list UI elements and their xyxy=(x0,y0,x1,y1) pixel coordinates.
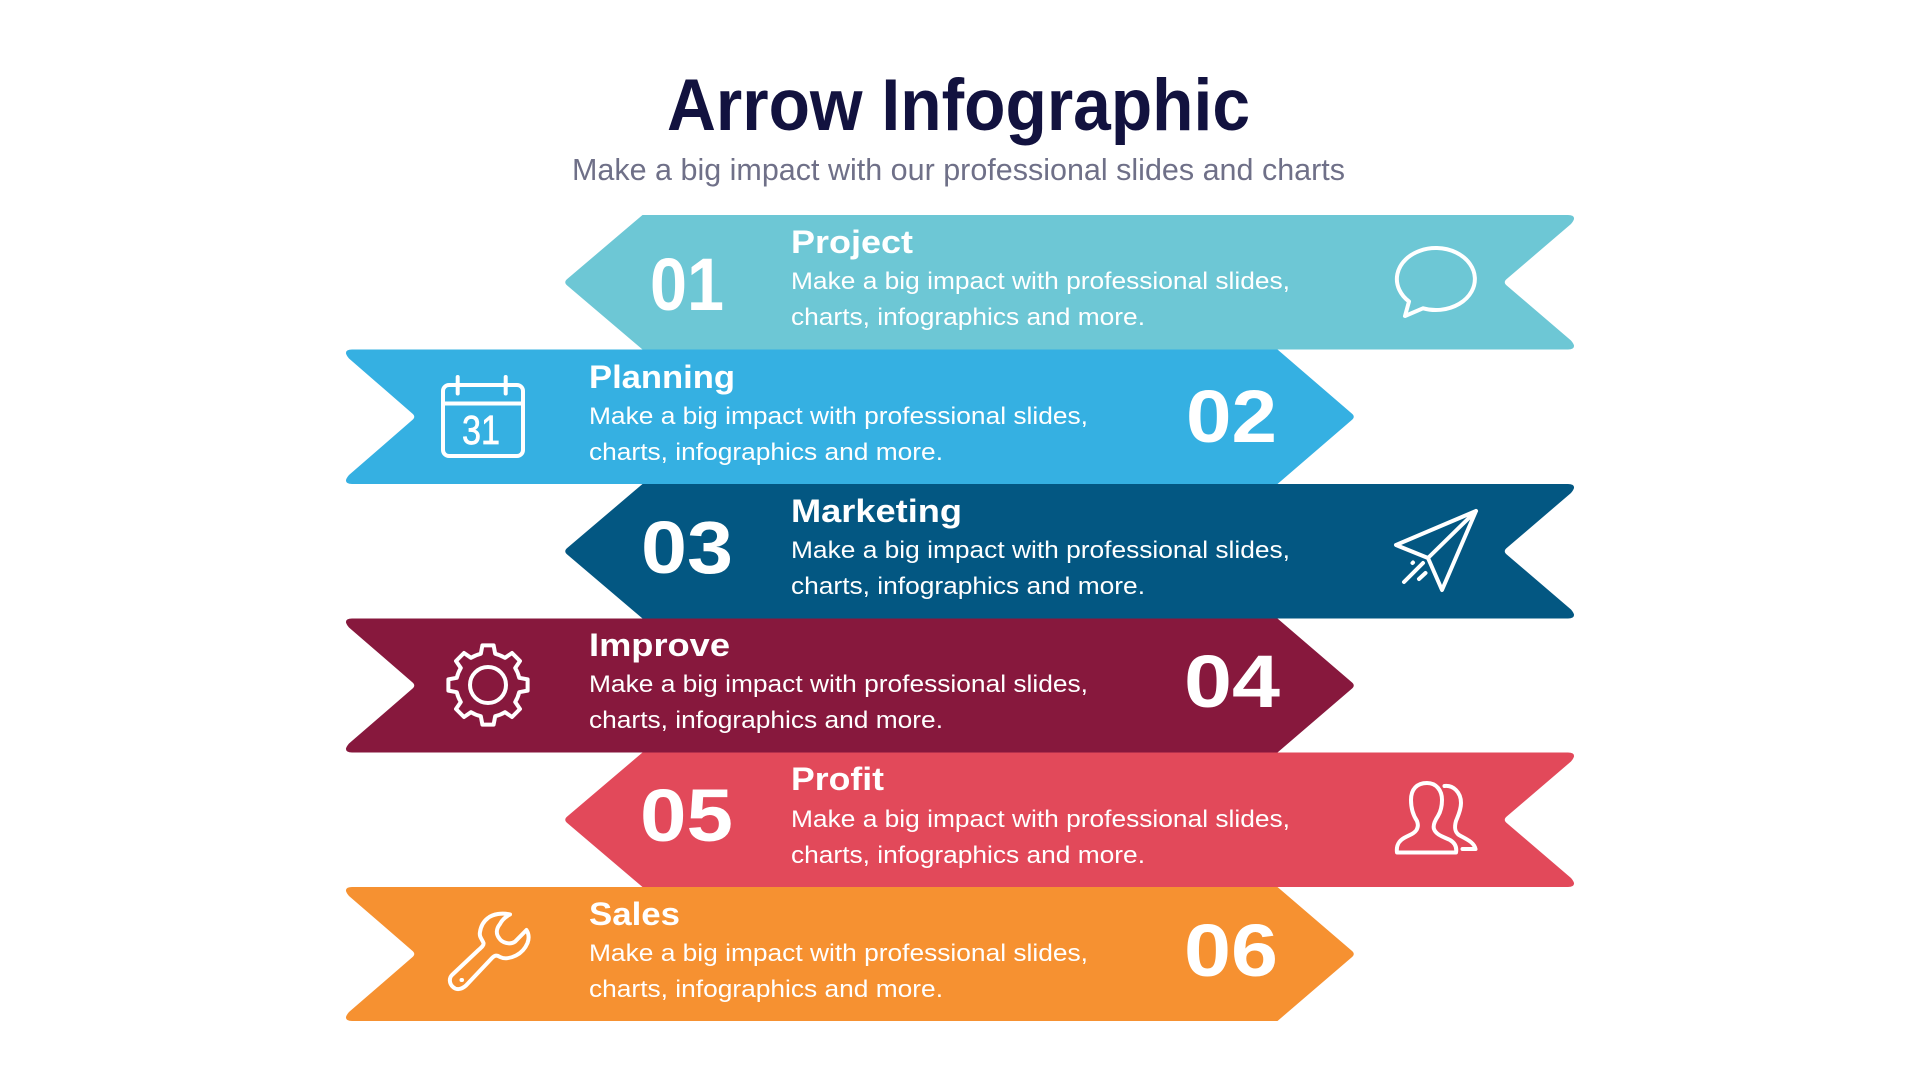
description: charts, infographics and more. xyxy=(589,439,943,466)
icon: wrench xyxy=(450,914,529,989)
description: charts, infographics and more. xyxy=(791,842,1145,869)
icon: gear xyxy=(448,645,528,725)
icon: calendar: 31 xyxy=(462,407,500,453)
description: Make a big impact with professional slides, xyxy=(791,268,1290,295)
arrow banner 03 xyxy=(565,484,1574,618)
description xyxy=(791,806,1290,869)
description xyxy=(589,671,1088,734)
icon: paper plane xyxy=(1396,511,1476,590)
number 01: 01 xyxy=(650,243,724,326)
description: charts, infographics and more. xyxy=(589,707,943,734)
number 06: 06 xyxy=(1184,909,1278,992)
description: Make a big impact with professional slides, xyxy=(589,940,1088,967)
description xyxy=(589,940,1088,1003)
arrow banner 01 xyxy=(565,215,1574,350)
icon: calendar xyxy=(443,377,523,456)
arrow banner 05 xyxy=(565,752,1574,887)
description: charts, infographics and more. xyxy=(589,976,943,1003)
subtitle: Make a big impact with our professional slides and charts xyxy=(572,152,1345,187)
number 03: 03 xyxy=(641,506,733,589)
panel: 03 Marketing xyxy=(565,484,1574,618)
description: Make a big impact with professional slides, xyxy=(589,403,1088,430)
title: Arrow Infographic xyxy=(667,65,1250,146)
panel: 05 Profit xyxy=(565,752,1574,887)
arrow banner 04 xyxy=(346,618,1354,752)
description xyxy=(589,403,1088,466)
description: Make a big impact with professional slides, xyxy=(791,806,1290,833)
panel: 02 Planning xyxy=(346,350,1354,484)
number 04: 04 xyxy=(1184,640,1280,723)
arrow banner 06 xyxy=(346,887,1354,1021)
description: Make a big impact with professional slides, xyxy=(589,671,1088,698)
icon: speech bubble xyxy=(1397,248,1475,316)
number 05: 05 xyxy=(640,774,733,857)
heading: Improve: Improve xyxy=(589,627,730,663)
heading: Profit: Profit xyxy=(791,761,884,797)
description: Make a big impact with professional slides, xyxy=(791,537,1290,564)
description xyxy=(791,268,1290,331)
heading: Planning: Planning xyxy=(589,359,735,395)
heading: Project: Project xyxy=(791,224,913,260)
panel: 04 Improve xyxy=(346,618,1354,752)
heading: Sales: Sales xyxy=(589,896,680,932)
panel: 06 Sales xyxy=(346,887,1354,1021)
description: charts, infographics and more. xyxy=(791,304,1145,331)
heading: Marketing: Marketing xyxy=(791,493,962,529)
arrow banner 02 xyxy=(346,350,1354,484)
panel: 01 Project xyxy=(565,215,1574,350)
icon: two users xyxy=(1397,783,1476,852)
description xyxy=(791,537,1290,600)
number 02: 02 xyxy=(1186,375,1277,458)
description: charts, infographics and more. xyxy=(791,573,1145,600)
